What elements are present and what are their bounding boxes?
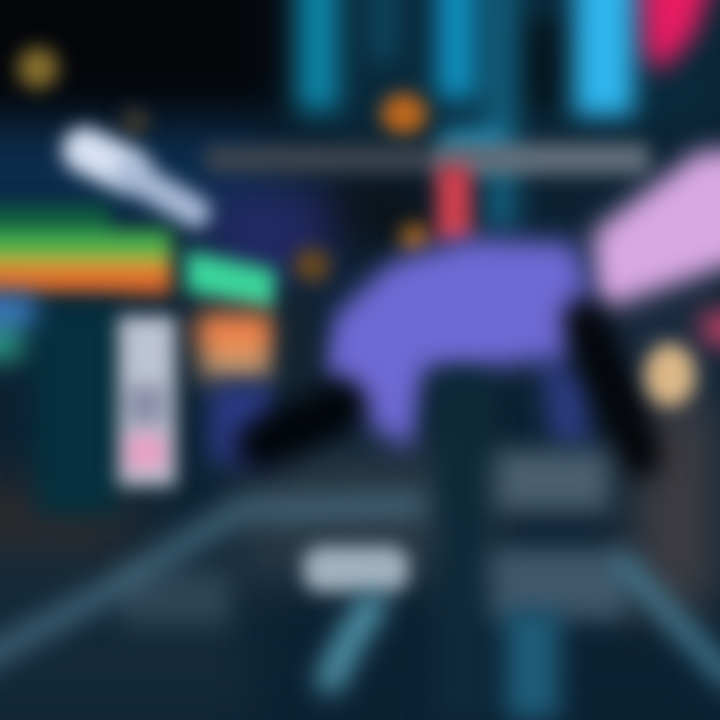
purple central shape xyxy=(322,238,592,450)
heading band xyxy=(205,143,650,175)
dark teal column xyxy=(0,295,120,515)
lower pointer stroke xyxy=(330,605,372,680)
grey floor blocks xyxy=(120,450,630,625)
navy block xyxy=(210,385,276,463)
bottom teal column xyxy=(505,610,560,720)
lower caption blob xyxy=(303,546,409,592)
tan circle xyxy=(644,343,696,407)
top neon signs xyxy=(298,0,720,230)
white diagonal label xyxy=(85,150,195,212)
pink panel xyxy=(592,150,720,346)
glowing spots xyxy=(17,47,430,284)
rainbow stripes xyxy=(0,205,172,294)
green label xyxy=(186,250,276,310)
orange block xyxy=(195,312,277,380)
red bar xyxy=(436,165,472,243)
black diagonal shapes xyxy=(262,290,640,720)
floor lines xyxy=(0,505,720,685)
white and pink column xyxy=(118,316,176,486)
